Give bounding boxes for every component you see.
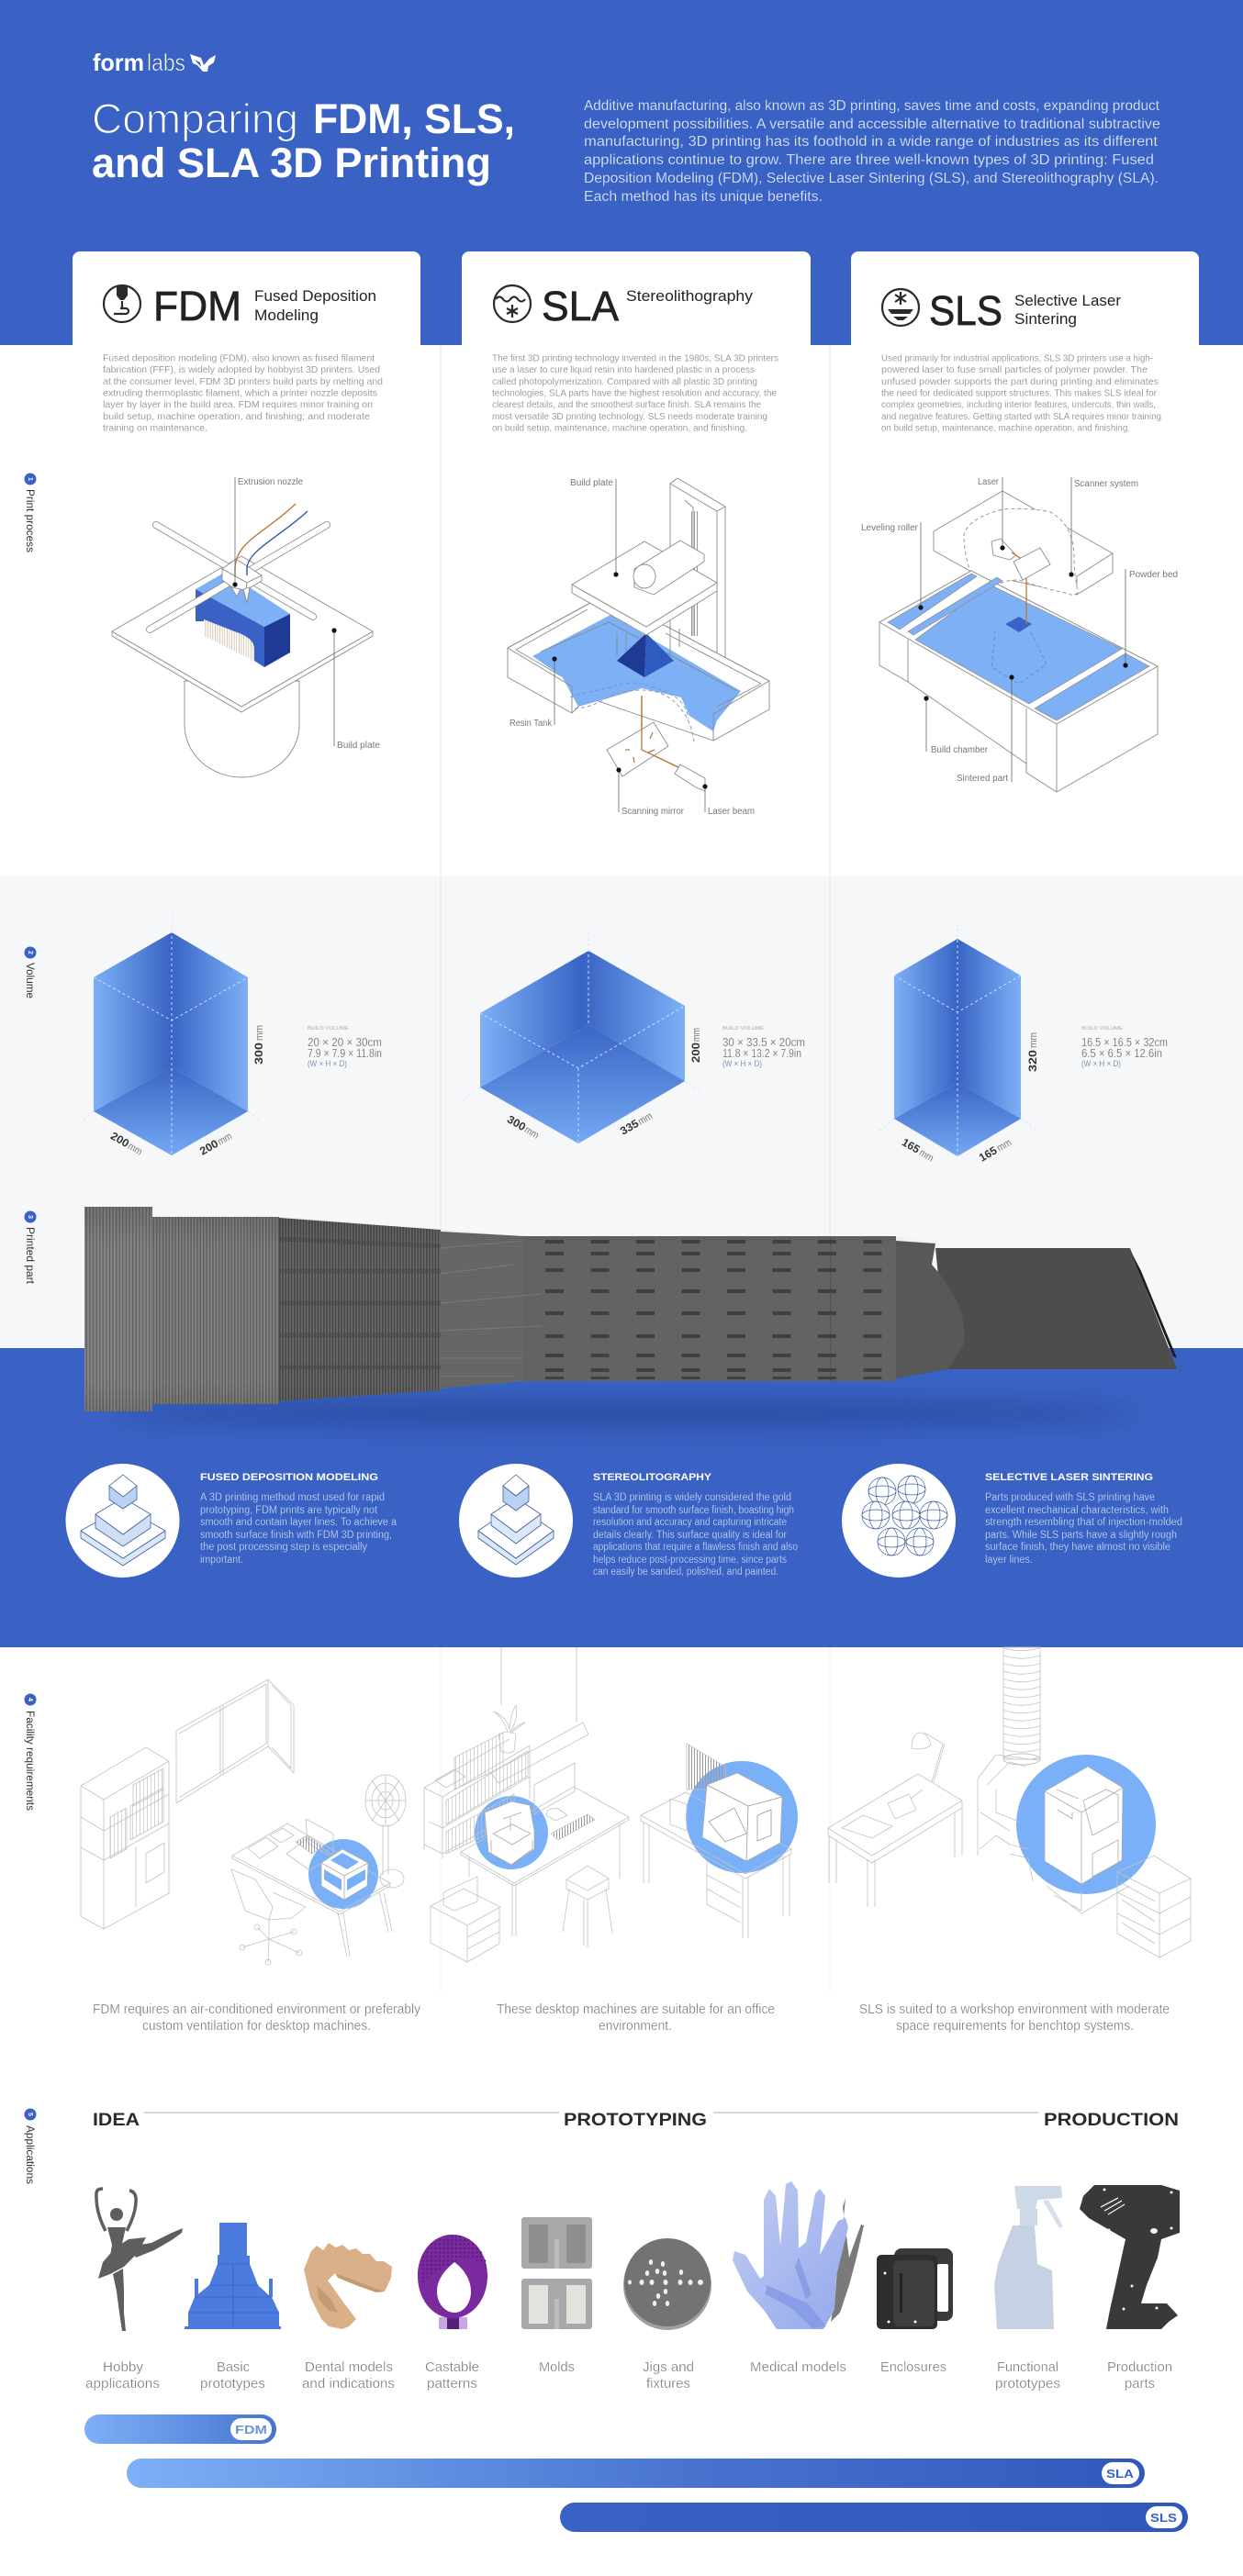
chart: SLS build volume cube: 165	[977, 1143, 1000, 1165]
diagram: SLS print process: Leveling roller	[861, 523, 919, 533]
diagram: SLS print process: Scanner system	[1074, 479, 1138, 489]
desk, laptop, fan and chair	[231, 1775, 406, 1965]
image: enclosure	[877, 2248, 953, 2329]
application labels: Functional	[997, 2360, 1058, 2375]
SLA description: called photopolymerization. Compared with all plastic 3D printing	[492, 376, 757, 387]
application labels: Production	[1107, 2360, 1172, 2375]
application labels: Molds	[539, 2360, 575, 2375]
scanner box	[934, 491, 1113, 595]
SLA description: on build setup, maintenance, machine operation, and finishing.	[492, 422, 747, 433]
SLA desktop machine small	[485, 1801, 534, 1865]
feature: Selective laser sintering: SELECTIVE LASER SINTERING	[985, 1472, 1153, 1483]
panel: SLS card	[851, 251, 1199, 433]
SLA build volume text: 30 × 33.5 × 20cm	[722, 1035, 805, 1049]
application labels: Enclosures	[880, 2360, 946, 2375]
duct	[1003, 1647, 1040, 1765]
SLS build volume text: 6.5 × 6.5 × 12.6in	[1081, 1046, 1162, 1060]
FDM finish text: smooth surface finish with FDM 3D printing,	[200, 1530, 392, 1541]
rail back	[156, 525, 313, 617]
FDM finish text: A 3D printing method most used for rapid	[200, 1492, 385, 1503]
SLA finish text: SLA 3D printing is widely considered the gold	[593, 1492, 791, 1503]
feature: Fused deposition modeling: FUSED DEPOSITION MODELING	[200, 1472, 378, 1483]
icon: FDM stepped layers	[81, 1475, 165, 1566]
SLS build volume text	[1081, 1026, 1168, 1069]
SLS description: unfused powder supports the part during printing and eliminates	[881, 376, 1159, 387]
FDM description: at the consumer level, FDM 3D printers build parts by melting and	[103, 376, 383, 387]
image: printed part nozzle	[84, 1207, 1177, 1411]
chart: SLS build volume cube: mm	[1028, 1032, 1039, 1048]
extruder head	[222, 559, 262, 603]
bar: SLS range: SLS	[1150, 2511, 1177, 2525]
caption: SLA facility	[497, 2002, 775, 2034]
diagram: SLA print process: Resin Tank	[510, 719, 553, 729]
icon: SLS laser	[882, 289, 919, 326]
title: Comparing	[92, 95, 298, 142]
chart: FDM build volume cube: 200	[197, 1137, 221, 1158]
SLA finish text: applications that require a flawless finish and also	[593, 1542, 798, 1553]
section label: 1 Print process: 1	[27, 477, 33, 481]
panel: FDM card	[73, 251, 420, 433]
chart: SLA build volume cube: 300	[505, 1112, 529, 1133]
feature: Selective laser sintering	[842, 1464, 1182, 1578]
panel: SLA card	[462, 251, 811, 433]
SLS build volume text: 16.5 × 16.5 × 32cm	[1081, 1035, 1168, 1049]
bar: FDM range	[84, 2414, 276, 2444]
panel: SLS card: Sintering	[1014, 311, 1077, 328]
FDM description: extruding thermoplastic filament, which a printer nozzle deposits	[103, 387, 377, 398]
build plate	[572, 541, 717, 635]
header	[92, 49, 1160, 205]
SLS finish text: layer lines.	[985, 1555, 1033, 1566]
SLS finish text: strength resembling that of injection-molded	[985, 1517, 1182, 1528]
diagram: SLS print process: Sintered part	[957, 774, 1008, 784]
SLS description: Used primarily for industrial applications, SLS 3D printers use a high-	[881, 352, 1153, 363]
SLA description	[492, 352, 778, 433]
diagram: FDM print process: Extrusion nozzle	[238, 477, 303, 487]
caption: SLS facility: SLS is suited to a workshop environment with moderate	[859, 2002, 1170, 2017]
application labels: and indications	[302, 2377, 395, 2392]
panel: FDM card: Fused Deposition	[254, 288, 376, 305]
application labels: prototypes	[995, 2377, 1060, 2392]
panel: SLA card: SLA	[542, 283, 619, 329]
SLA description: clearest details, and the smoothest surface finish. SLA remains the	[492, 399, 761, 410]
application labels: Dental models	[305, 2360, 393, 2375]
panel: SLS card: Selective Laser	[1014, 293, 1122, 309]
application labels	[85, 2360, 1172, 2392]
chart: FDM build volume cube	[81, 914, 382, 1158]
application labels: parts	[1125, 2377, 1155, 2392]
icon: SLA smooth layers	[478, 1475, 554, 1565]
diagram: SLA print process	[508, 478, 769, 817]
timeline heading: idea to production: PROTOTYPING	[564, 2111, 707, 2130]
section label: 2 Volume: 2	[27, 951, 33, 954]
SLA finish text	[593, 1492, 798, 1578]
background: header blue band	[0, 0, 1243, 345]
illustration: FDM facility	[81, 1679, 406, 1965]
bar: SLA range: SLA	[1106, 2467, 1135, 2481]
diagram: FDM print process: Build plate	[337, 741, 380, 751]
application labels: applications	[85, 2377, 160, 2392]
laser path and mirror	[607, 696, 705, 791]
FDM description: layer by layer in the build area. FDM requires minor training on	[103, 399, 373, 410]
section label: 5 Applications: Applications	[24, 2125, 37, 2184]
SLA build volume text: BUILD VOLUME	[722, 1026, 764, 1032]
application labels: prototypes	[200, 2377, 265, 2392]
image: medical hand model	[733, 2181, 864, 2329]
SLA description: most versatile 3D printing technology. SLS needs moderate training	[492, 411, 767, 422]
image: spray bottle	[994, 2186, 1063, 2329]
intro paragraph: Deposition Modeling (FDM), Selective Laser Sintering (SLS), and Stereolithography (SLA).	[584, 171, 1159, 186]
icon: SLS sintered spheres	[862, 1476, 947, 1556]
image: dental model	[304, 2243, 392, 2329]
rail front	[150, 525, 327, 630]
icon: SLA resin	[494, 285, 531, 322]
section label: 5 Applications: 5	[27, 2113, 33, 2116]
SLS description: and negative features. Getting started with SLA requires minor training	[881, 411, 1161, 422]
FDM build volume text: 20 × 20 × 30cm	[308, 1035, 382, 1049]
chart: SLA build volume cube: mm	[691, 1028, 702, 1042]
section label: 2 Volume	[24, 947, 37, 998]
illustration: SLA facility	[424, 1647, 798, 1962]
application labels: Basic	[217, 2360, 250, 2375]
caption: SLA facility: environment.	[599, 2018, 672, 2034]
SLS finish text: Parts produced with SLS printing have	[985, 1492, 1155, 1503]
section label: 3 Printed part: 3	[27, 1215, 33, 1219]
FDM description: build setup, machine operation, and finishing; and moderate	[103, 411, 370, 422]
FDM finish text: important.	[200, 1555, 243, 1566]
panel: SLS card: SLS	[929, 287, 1002, 334]
diagram: SLA print process: Build plate	[570, 478, 613, 488]
bar: SLA range	[127, 2459, 1145, 2488]
application labels: Jigs and	[643, 2360, 694, 2375]
intro paragraph: Additive manufacturing, also known as 3D printing, saves time and costs, expanding product	[584, 98, 1160, 114]
FDM finish text: prototyping, FDM prints are typically not	[200, 1505, 378, 1516]
illustration: SLS facility	[828, 1647, 1191, 1957]
timeline heading: idea to production: PRODUCTION	[1044, 2111, 1179, 2130]
SLA finish text: can easily be sanded, polished, and painted.	[593, 1567, 778, 1578]
image: castable ring pattern	[418, 2235, 487, 2329]
chart: FDM build volume cube: 300	[252, 1043, 265, 1065]
diagram: SLS print process: Powder bed	[1129, 570, 1178, 580]
background: printed part blue band	[0, 1348, 1243, 1647]
SLS machine	[1045, 1767, 1123, 1884]
title: and SLA 3D Printing	[92, 139, 491, 186]
application labels: patterns	[427, 2377, 477, 2392]
chart: SLA build volume cube: mm	[636, 1110, 655, 1128]
panel: FDM card: Modeling	[254, 307, 319, 324]
section label: 4 Facility requirements: Facility requirements	[24, 1711, 37, 1811]
cabinet	[81, 1747, 169, 1929]
chart: FDM build volume cube: 200	[108, 1129, 132, 1150]
intro paragraph: applications continue to grow. There are three well-known types of 3D printing: Fused	[584, 152, 1154, 168]
image: molds	[521, 2217, 592, 2329]
background: volume grey band	[0, 876, 1243, 1348]
title	[92, 95, 515, 186]
SLS description: complex geometries, including interior features, undercuts, thin walls,	[881, 399, 1156, 410]
image: jig disc	[623, 2238, 711, 2330]
diagram: SLA print process: Laser beam	[708, 807, 755, 817]
icon: FDM nozzle	[104, 285, 140, 322]
timeline heading: idea to production: IDEA	[93, 2111, 140, 2130]
SLS finish text	[985, 1492, 1182, 1566]
diagram: SLS print process	[861, 477, 1178, 792]
SLA finish text: resolution and accuracy and capturing intricate	[593, 1517, 787, 1528]
SLA description: The first 3D printing technology invented in the 1980s, SLA 3D printers	[492, 352, 778, 363]
intro paragraph	[584, 98, 1160, 205]
image: ballerina	[96, 2189, 183, 2331]
SLA large machine	[702, 1773, 782, 1861]
logo: formlabs: labs	[147, 49, 185, 76]
chart: SLA build volume cube: mm	[522, 1124, 541, 1142]
laser and scanner	[991, 539, 1050, 624]
SLS finish text: parts. While SLS parts have a slightly rough	[985, 1530, 1177, 1541]
table, lamp, enclosure, cart	[828, 1733, 1191, 1957]
caption: FDM facility: custom ventilation for desktop machines.	[142, 2018, 371, 2034]
chart: SLS build volume cube: 165	[900, 1135, 923, 1156]
chart: SLS build volume cube	[879, 923, 1168, 1165]
application labels: Medical models	[750, 2360, 846, 2375]
chart: SLS build volume cube: 320	[1026, 1050, 1039, 1072]
application labels: fixtures	[646, 2377, 690, 2392]
SLA description: technologies, SLA parts have the highest resolution and accuracy, the	[492, 387, 777, 398]
diagram: SLS print process: Build chamber	[931, 745, 989, 755]
SLS build volume text: (W × H × D)	[1081, 1059, 1121, 1069]
printed blue part	[196, 572, 290, 667]
FDM build volume text: BUILD VOLUME	[308, 1026, 349, 1032]
timeline heading: idea to production	[93, 2111, 1179, 2130]
SLA description: use a laser to cure liquid resin into hardened plastic in a process	[492, 364, 755, 375]
chart: SLA build volume cube: 335	[618, 1117, 642, 1138]
SLA finish text: helps reduce post-processing time, since parts	[593, 1555, 787, 1566]
main chamber	[879, 571, 1158, 792]
intro paragraph: Each method has its unique benefits.	[584, 189, 823, 205]
FDM build volume text	[308, 1026, 382, 1069]
chart: FDM build volume cube: mm	[126, 1141, 144, 1158]
caption: FDM facility: FDM requires an air-conditioned environment or preferably	[93, 2002, 420, 2017]
bar: FDM range: FDM	[235, 2423, 267, 2437]
diagram: SLA print process: Scanning mirror	[622, 807, 685, 817]
feature: Stereolithography	[459, 1464, 798, 1578]
application labels: Castable	[425, 2360, 479, 2375]
SLS build volume text: BUILD VOLUME	[1081, 1026, 1123, 1032]
diagram: FDM print process	[112, 477, 380, 777]
caption: SLS facility: space requirements for benchtop systems.	[896, 2018, 1134, 2034]
chart: FDM build volume cube: mm	[254, 1025, 265, 1041]
intro paragraph: manufacturing, 3D printing has its foothold in a wide range of industries as its different	[584, 134, 1159, 150]
FDM finish text: smooth and contain layer lines. To achieve a	[200, 1517, 398, 1528]
section label: 2 Volume: Volume	[24, 963, 37, 998]
bar: SLS range	[560, 2503, 1188, 2532]
resin tank	[508, 603, 769, 742]
application labels: Hobby	[103, 2360, 144, 2375]
logo: formlabs	[93, 49, 216, 76]
intro paragraph: development possibilities. A versatile and accessible alternative to traditional subtractive	[584, 117, 1160, 132]
printed part shadow	[110, 1400, 1138, 1426]
chart: SLS build volume cube: mm	[917, 1147, 935, 1165]
SLS description: the need for dedicated support structures. This makes SLS ideal for	[881, 387, 1157, 398]
image: blue funnel prototype	[185, 2223, 281, 2329]
SLS description	[881, 352, 1161, 433]
logo: formlabs: form	[93, 49, 144, 76]
section label: 3 Printed part: Printed part	[24, 1227, 37, 1285]
FDM build volume text: (W × H × D)	[308, 1059, 347, 1069]
title: FDM, SLS,	[313, 95, 515, 142]
FDM finish text	[200, 1492, 398, 1566]
SLA build volume text: 11.8 × 13.2 × 7.9in	[722, 1046, 801, 1060]
FDM description: fabrication (FFF), is widely adopted by hobbyist 3D printers. Used	[103, 364, 380, 375]
SLA build volume text	[722, 1026, 805, 1069]
SLS description: on build setup, maintenance, machine operation, and finishing.	[881, 422, 1130, 433]
section label: 4 Facility requirements: 4	[27, 1698, 33, 1701]
SLS description: powered laser to fuse small particles of polymer powder. The	[881, 364, 1148, 375]
panel: SLA card: Stereolithography	[626, 288, 754, 305]
chart: SLA build volume cube: 200	[689, 1043, 702, 1063]
feature: Stereolithography: STEREOLITOGRAPHY	[593, 1472, 712, 1483]
window	[176, 1679, 294, 1803]
SLA build volume text: (W × H × D)	[722, 1059, 762, 1069]
part pyramid	[617, 624, 679, 677]
slot rows	[545, 1240, 885, 1379]
FDM description	[103, 352, 383, 433]
image: production handle part	[1080, 2185, 1180, 2329]
diagram: SLS print process: Laser	[978, 477, 1000, 487]
FDM build volume text: 7.9 × 7.9 × 11.8in	[308, 1046, 382, 1060]
panel: FDM card: FDM	[153, 283, 241, 329]
chart: SLS build volume cube: mm	[995, 1137, 1013, 1154]
section label: 1 Print process: Print process	[24, 489, 37, 552]
caption: SLS facility	[859, 2002, 1170, 2034]
SLS finish text: excellent mechanical characteristics, with	[985, 1505, 1169, 1516]
feature: Fused deposition modeling	[66, 1464, 398, 1578]
FDM machine	[321, 1849, 368, 1900]
FDM finish text: the post processing step is especially	[200, 1542, 367, 1553]
SLA finish text: details clearly. This surface quality is ideal for	[593, 1530, 787, 1541]
caption: FDM facility	[93, 2002, 420, 2034]
FDM description: training on maintenance.	[103, 422, 207, 433]
chart: SLA build volume cube	[464, 932, 805, 1143]
column	[670, 478, 725, 661]
FDM description: Fused deposition modeling (FDM), also known as fused filament	[103, 352, 375, 363]
SLS finish text: surface finish, they have almost no visible	[985, 1542, 1170, 1553]
chart: FDM build volume cube: mm	[216, 1131, 234, 1148]
caption: SLA facility: These desktop machines are suitable for an office	[497, 2002, 775, 2017]
SLA finish text: standard for smooth surface finish, boasting high	[593, 1505, 794, 1516]
shelf, monitor, desk	[424, 1647, 791, 1962]
